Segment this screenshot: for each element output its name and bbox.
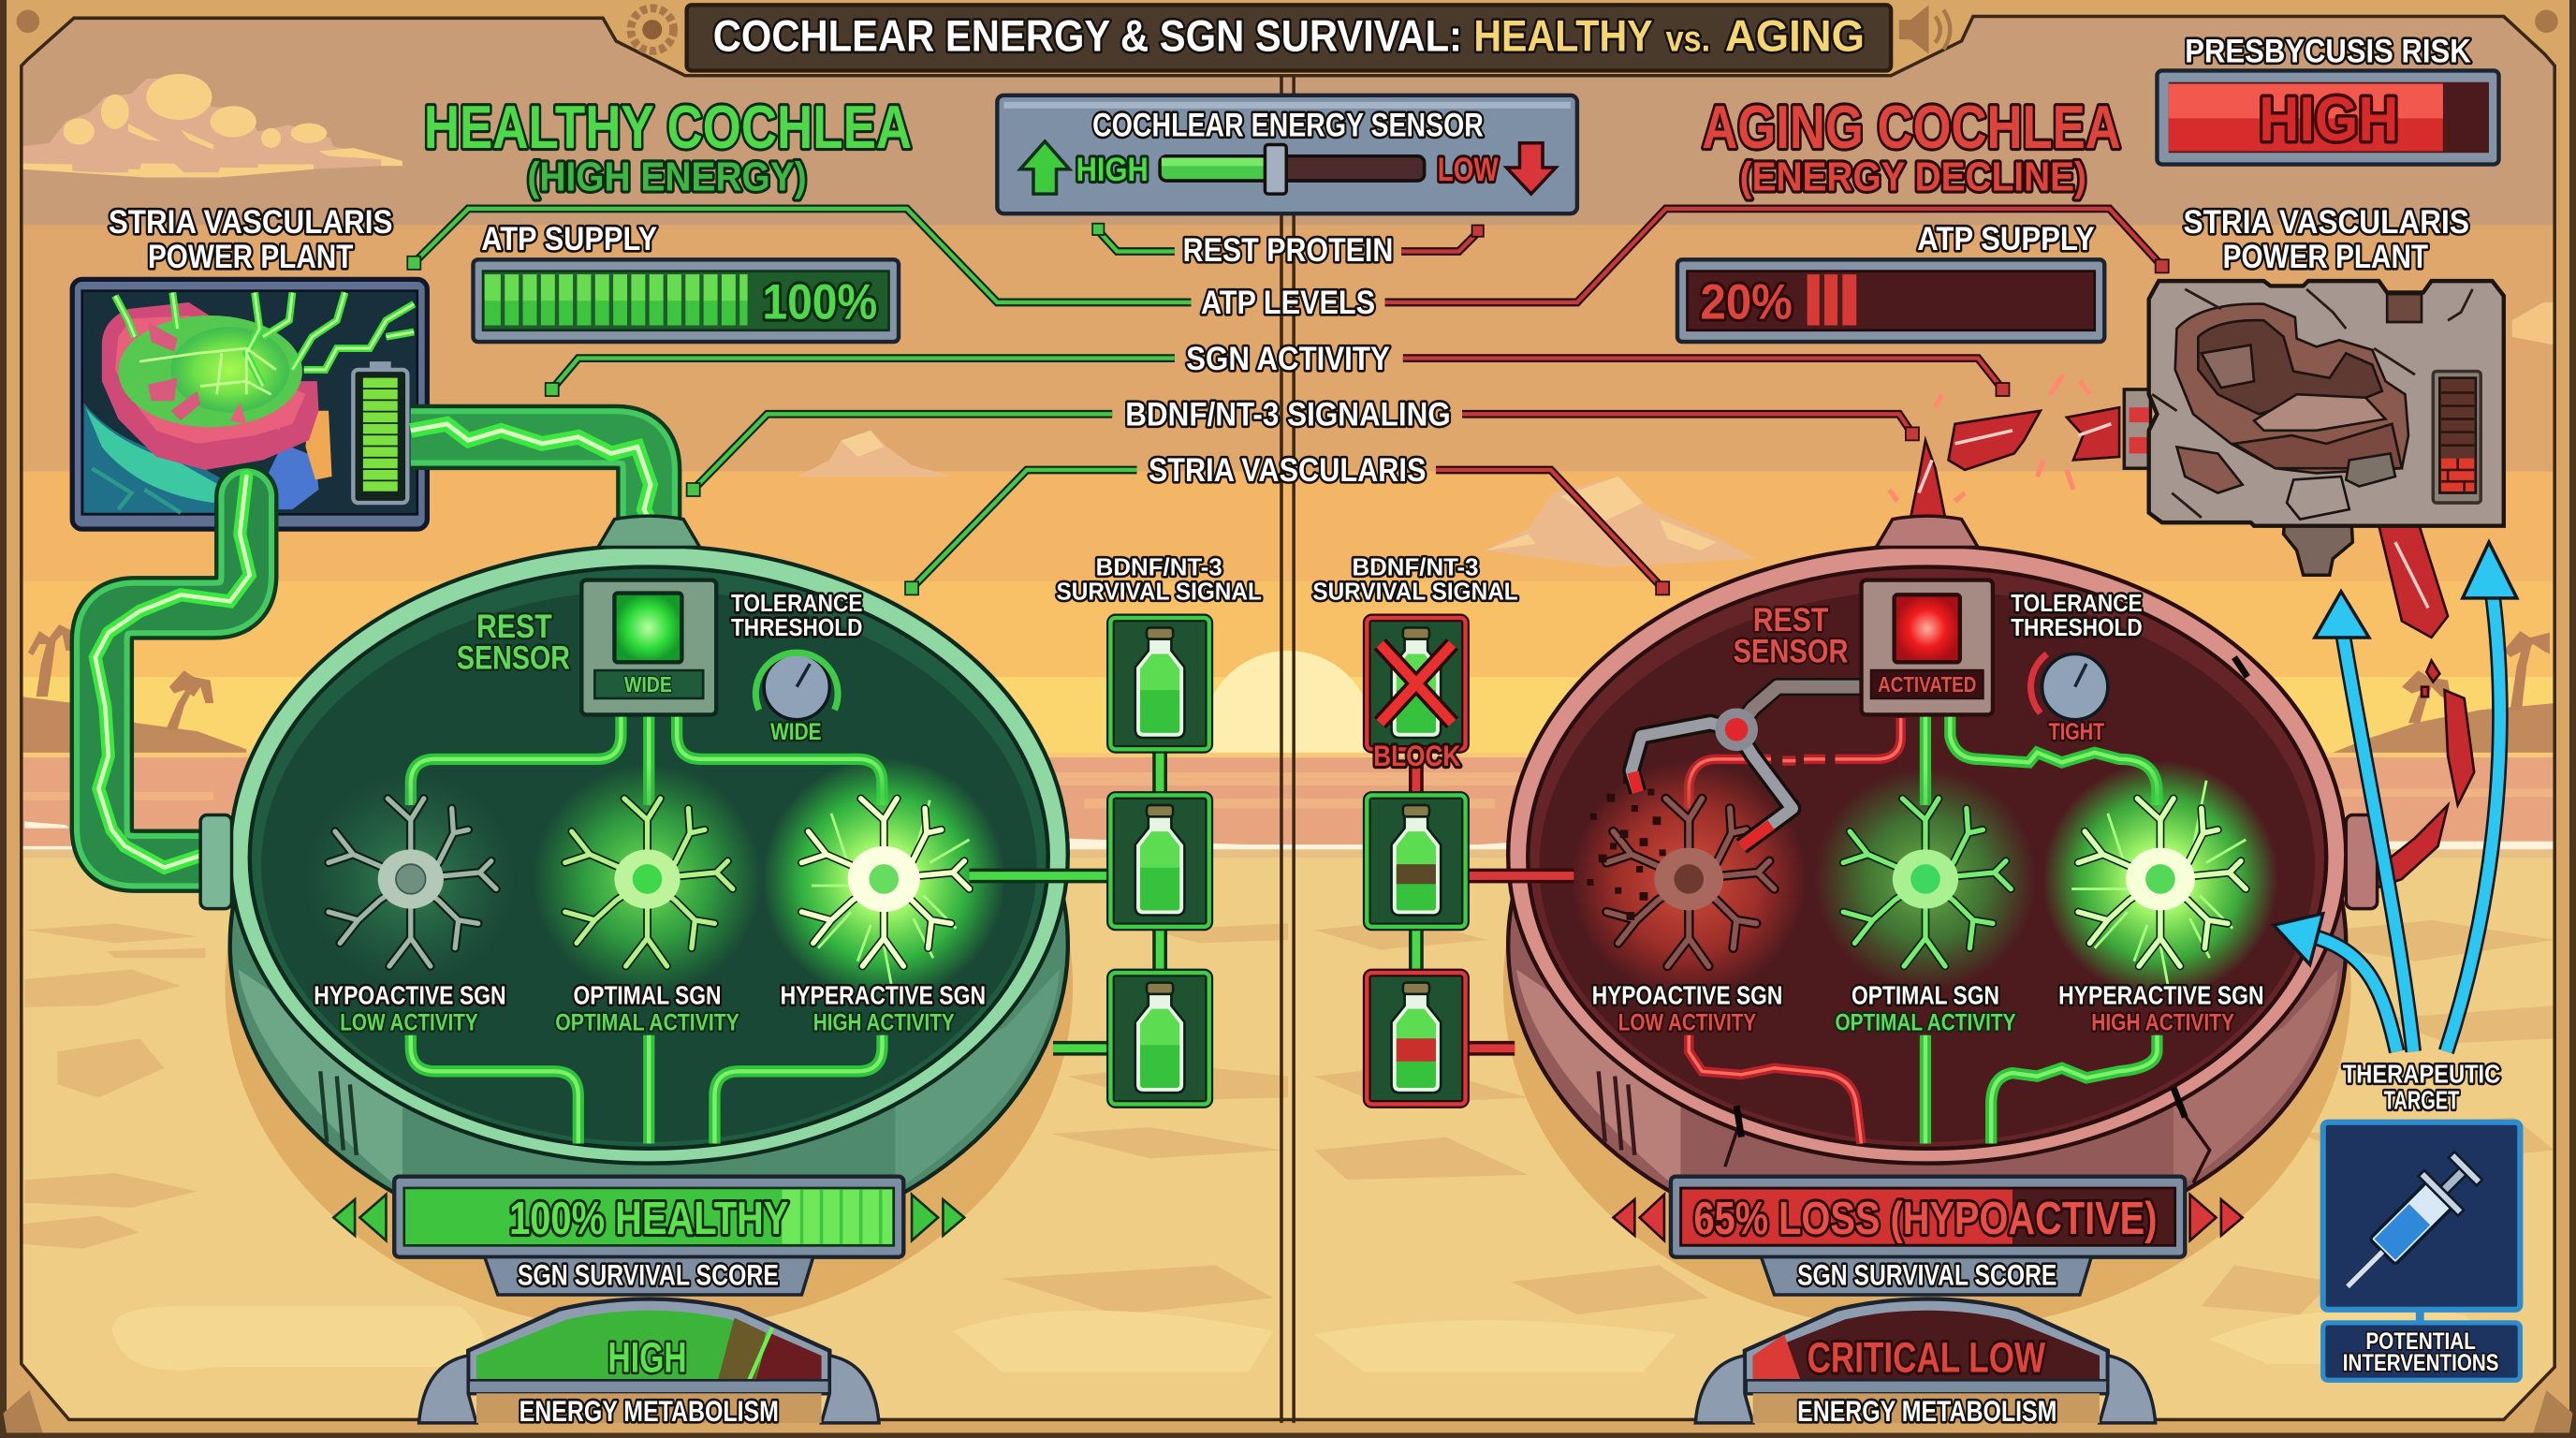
- power plant: healthy: [72, 279, 427, 529]
- inner chamber: [250, 567, 1048, 1149]
- chevrons: [333, 1195, 964, 1240]
- title bar: HEALTHY: [1473, 11, 1653, 61]
- label: rest protein: REST PROTEIN: [1183, 232, 1393, 269]
- pipe: plant to cochlea top: [411, 424, 654, 534]
- ground shadow: [1503, 640, 2351, 1331]
- stone block: [2149, 281, 2504, 526]
- lightning: [115, 292, 414, 394]
- score bar: healthy: [333, 1177, 964, 1257]
- circuit tubes: [411, 714, 882, 1144]
- icon: down arrow: [1506, 143, 1556, 194]
- neuron labels: [314, 980, 986, 1035]
- body wall: [1508, 633, 2346, 1257]
- icon: speaker: [1899, 5, 1950, 54]
- neuron labels: OPTIMAL SGN: [574, 980, 721, 1009]
- heading: healthy cochlea: (HIGH ENERGY): [527, 154, 807, 200]
- neuron labels: OPTIMAL SGN: [1852, 980, 1999, 1009]
- cloud: center left: [797, 431, 953, 477]
- neuron labels: HYPERACTIVE SGN: [2058, 980, 2264, 1009]
- rest sensor label: SENSOR: [1734, 633, 1848, 669]
- score label: aging: SGN SURVIVAL SCORE: [1797, 1257, 2056, 1291]
- rest sensor label: REST: [1753, 602, 1829, 638]
- atp supply: healthy: 100%: [762, 274, 877, 330]
- claw attacking neuron: [1632, 687, 1862, 846]
- title bar: AGING: [1725, 11, 1865, 61]
- connector lines: red: [1385, 209, 2169, 594]
- neuron labels: HYPERACTIVE SGN: [781, 980, 986, 1009]
- signal label: SURVIVAL SIGNAL: [1057, 578, 1262, 606]
- signal label: BDNF/NT-3: [1352, 552, 1479, 580]
- energy slider: [1160, 144, 1425, 194]
- heading: aging cochlea: AGING COCHLEA: [1702, 93, 2121, 161]
- panel: syringe: [2323, 1123, 2520, 1323]
- neuron: damaged hypoactive: [1571, 761, 1808, 997]
- bdnf signal column: aging: [1312, 552, 1573, 1104]
- panel: potential interventions: [2323, 1323, 2520, 1380]
- neuron labels: HIGH ACTIVITY: [2091, 1010, 2234, 1035]
- panel: presbycusis risk: [2157, 34, 2499, 165]
- heading: healthy cochlea: [424, 93, 912, 200]
- side port: [200, 815, 231, 909]
- dunes on horizon: [22, 697, 2554, 753]
- score label: healthy: SGN SURVIVAL SCORE: [518, 1257, 779, 1291]
- label: bdnf signaling: BDNF/NT-3 SIGNALING: [1125, 397, 1451, 433]
- neuron labels: HYPOACTIVE SGN: [314, 980, 506, 1009]
- rest sensor box: [581, 580, 716, 714]
- label: sgn activity: SGN ACTIVITY: [1186, 341, 1390, 377]
- bdnf signal column: healthy: [970, 552, 1262, 1104]
- vial 2: [1367, 795, 1466, 927]
- rim: [230, 546, 1068, 1164]
- reactor: [84, 302, 332, 513]
- label: stria vascularis: STRIA VASCULARIS: [1149, 452, 1426, 489]
- body wall: [230, 633, 1068, 1257]
- neuron: hyperactive: [2042, 761, 2278, 997]
- panel: presbycusis risk: PRESBYCUSIS RISK: [2185, 34, 2471, 70]
- cracks: [1736, 657, 2247, 1137]
- signal label: SURVIVAL SIGNAL: [1312, 578, 1518, 606]
- atp supply: aging: [1677, 221, 2104, 342]
- label: atp levels: ATP LEVELS: [1201, 285, 1375, 321]
- chevrons: [1614, 1195, 2243, 1240]
- energy gauge: healthy: [419, 1299, 879, 1428]
- icon: syringe: [2328, 1146, 2488, 1306]
- ground shadow: [225, 640, 1073, 1331]
- heading: aging cochlea: (ENERGY DECLINE): [1740, 154, 2086, 200]
- therapeutic arrows: [2274, 542, 2517, 1051]
- score bar: healthy: 100% HEALTHY: [509, 1194, 788, 1244]
- atp supply: healthy: [473, 221, 899, 342]
- block label: BLOCK: [1373, 739, 1460, 772]
- green circuit tubes: [1925, 714, 2157, 1144]
- neuron labels: LOW ACTIVITY: [340, 1010, 478, 1035]
- label: left power plant: [109, 204, 392, 275]
- energy gauge: healthy: ENERGY METABOLISM: [520, 1394, 779, 1428]
- icon: gear: [631, 8, 674, 51]
- vial 2: [1110, 795, 1209, 927]
- side port: [2346, 815, 2378, 909]
- neuron labels: HYPOACTIVE SGN: [1592, 980, 1782, 1009]
- icon: up arrow: [1020, 141, 1070, 194]
- score bar: aging: 65% LOSS (HYPOACTIVE): [1694, 1194, 2157, 1244]
- cochlea: aging: [1503, 516, 2378, 1331]
- top port: [1876, 516, 1978, 547]
- atp supply: aging: 20%: [1701, 274, 1793, 330]
- power plant: aging (ruined): [2124, 281, 2504, 575]
- heading: aging cochlea: [1702, 93, 2121, 200]
- panel: potential interventions: INTERVENTIONS: [2343, 1351, 2499, 1376]
- cloud: center right: [1486, 477, 1756, 567]
- label: left power plant: STRIA VASCULARIS: [109, 204, 392, 241]
- signal connectors: [970, 749, 1160, 1049]
- rest sensor label: [1734, 602, 1848, 669]
- neuron labels: HIGH ACTIVITY: [813, 1010, 955, 1035]
- pipe: plant to cochlea side: [95, 477, 250, 868]
- energy gauge: aging: [1695, 1299, 2156, 1428]
- vial 3: [1110, 973, 1209, 1104]
- title text: COCHLEAR ENERGY & SGN SURVIVAL:: [713, 11, 1462, 61]
- signal label: [1057, 552, 1262, 606]
- neuron labels: OPTIMAL ACTIVITY: [555, 1010, 739, 1035]
- tolerance label: THRESHOLD: [2011, 613, 2143, 641]
- rim: [1508, 546, 2346, 1164]
- rest sensor box: ACTIVATED: [1878, 672, 1976, 697]
- top port: [598, 516, 700, 547]
- neuron: optimal: [1814, 768, 2037, 990]
- neuron: hypoactive: [305, 774, 516, 984]
- label: right power plant: [2184, 204, 2469, 275]
- connector lines: green: [407, 209, 1191, 594]
- tolerance label: [731, 589, 862, 641]
- signal connectors: [1416, 764, 1573, 1049]
- tolerance label: TOLERANCE: [731, 589, 862, 617]
- energy gauge: aging: CRITICAL LOW: [1808, 1334, 2046, 1382]
- panel: cochlear energy sensor: HIGH: [1076, 152, 1149, 188]
- pipe stub: [2124, 389, 2150, 468]
- broken pipe fragments: [1889, 374, 2474, 890]
- energy gauge: healthy: HIGH: [607, 1334, 687, 1382]
- broken battery: [2433, 372, 2481, 503]
- rest sensor box: WIDE: [624, 672, 672, 697]
- tolerance dial: WIDE: [770, 720, 822, 745]
- tolerance label: TOLERANCE: [2011, 589, 2143, 617]
- battery: [353, 361, 407, 503]
- panel: presbycusis risk: HIGH: [2259, 85, 2398, 154]
- spiral ruin: [2175, 304, 2408, 520]
- cracks: [2152, 289, 2472, 518]
- clouds and palm trees: [22, 74, 2554, 753]
- central divider: [1281, 76, 1294, 1423]
- neuron: optimal: [533, 764, 762, 994]
- damaged red tubes: [1689, 718, 1901, 1144]
- panel: cochlear energy sensor: [997, 95, 1577, 213]
- label: therapeutic target: THERAPEUTIC: [2343, 1060, 2500, 1089]
- tolerance dial: [2031, 654, 2108, 745]
- score bar: aging: [1614, 1177, 2243, 1257]
- panel: cochlear energy sensor: COCHLEAR ENERGY SENSOR: [1092, 108, 1484, 144]
- vial blocked: [1367, 618, 1466, 749]
- vial 1: [1110, 618, 1209, 749]
- rest sensor box: [1862, 580, 1993, 714]
- tolerance dial: [755, 653, 838, 745]
- label: right power plant: POWER PLANT: [2223, 239, 2429, 275]
- energy gauge: aging: ENERGY METABOLISM: [1797, 1394, 2056, 1428]
- label: left power plant: POWER PLANT: [148, 239, 354, 275]
- heading: healthy cochlea: HEALTHY COCHLEA: [424, 93, 912, 161]
- neuron labels: LOW ACTIVITY: [1618, 1010, 1756, 1035]
- panel: cochlear energy sensor: LOW: [1438, 152, 1499, 188]
- title bar: [687, 5, 1891, 70]
- label: therapeutic target: TARGET: [2384, 1086, 2459, 1115]
- rest sensor label: REST: [476, 609, 552, 645]
- label: therapeutic target: [2343, 1060, 2500, 1115]
- atp supply: aging: ATP SUPPLY: [1917, 221, 2095, 257]
- label: right power plant: STRIA VASCULARIS: [2184, 204, 2469, 241]
- vial 3: [1367, 973, 1466, 1104]
- atp supply: healthy: ATP SUPPLY: [481, 221, 657, 257]
- rest sensor label: [457, 609, 570, 676]
- cloud: upper left: [23, 74, 402, 178]
- panel: potential interventions: POTENTIAL: [2365, 1329, 2476, 1355]
- palm trees: [28, 624, 2550, 729]
- neuron labels: [1592, 980, 2264, 1035]
- tolerance label: [2011, 589, 2143, 641]
- rest sensor label: SENSOR: [457, 639, 570, 676]
- neuron labels: OPTIMAL ACTIVITY: [1835, 1010, 2016, 1035]
- signal label: [1312, 552, 1518, 606]
- tolerance dial: TIGHT: [2049, 720, 2104, 745]
- inner chamber: [1528, 567, 2326, 1149]
- title bar: vs.: [1666, 19, 1710, 59]
- rubble lump: [2284, 479, 2352, 575]
- tolerance label: THRESHOLD: [731, 613, 862, 641]
- neuron: hyperactive: [762, 757, 1005, 1001]
- cochlea: healthy: [200, 516, 1073, 1331]
- signal label: BDNF/NT-3: [1096, 552, 1222, 580]
